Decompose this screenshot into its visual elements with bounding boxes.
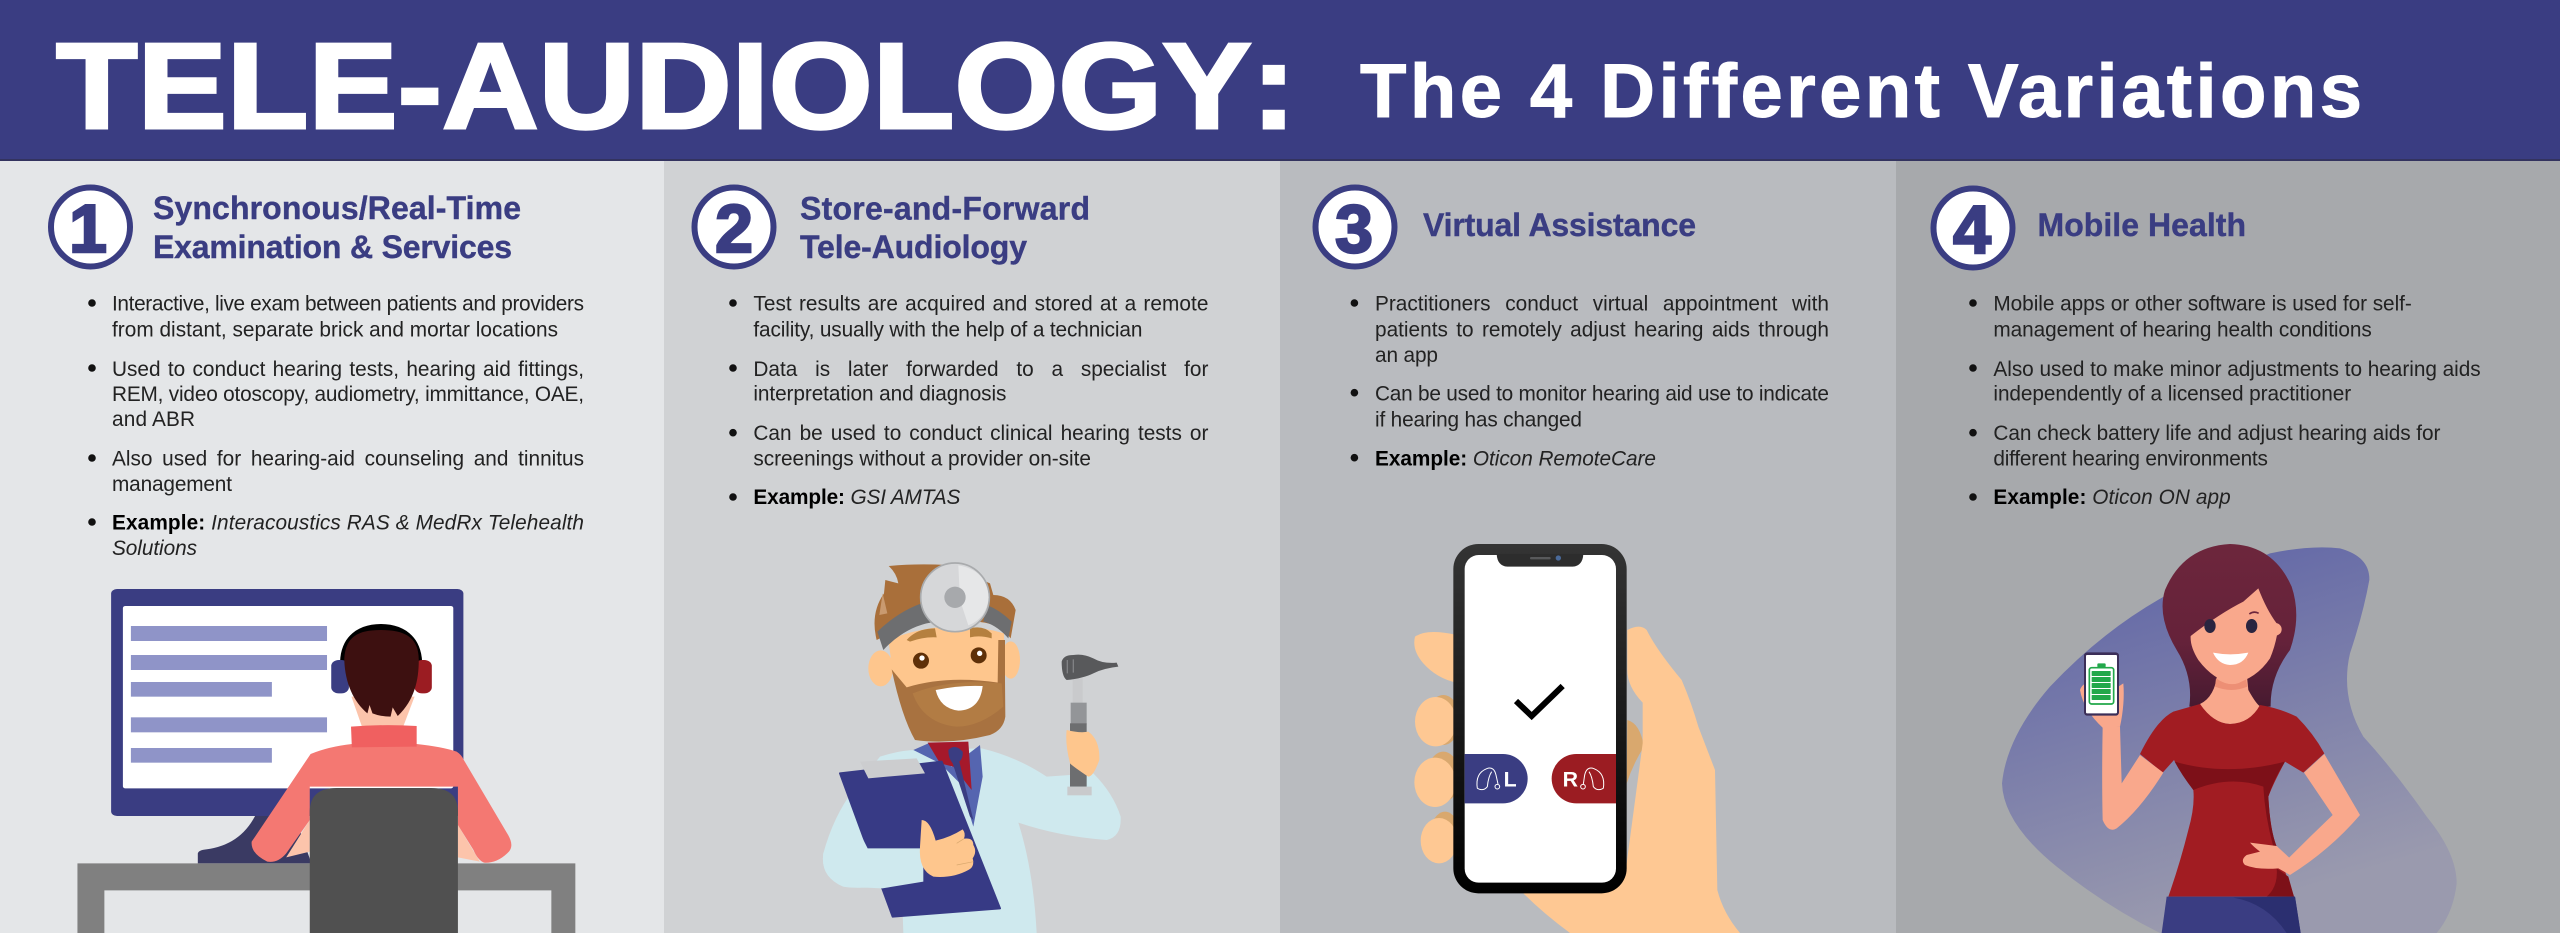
number badge 2 [694,188,774,267]
bullet list 2 [729,293,1208,509]
bullet list 3: Can be used to monitor hearing aid use to indicate [1375,383,1829,406]
bullet list 3: Practitioners conduct virtual appointment with [1375,293,1829,316]
bullet list 4: Mobile apps or other software is used for self- [1993,293,2412,316]
header banner [0,0,2560,161]
heading 2: Tele-Audiology [800,229,1027,265]
raised arm [2102,727,2163,830]
bullet list 2: screenings without a provider on-site [753,447,1091,470]
bullet list 1: REM, video otoscopy, audiometry, immittance, OAE, [112,383,584,406]
illustration: person at computer with headphones [77,589,575,933]
bullet list 1: Used to conduct hearing tests, hearing aid fittings, [112,358,584,381]
desk [77,863,575,933]
bullet list 4: Can check battery life and adjust hearing aids for [1993,422,2440,445]
background blob [2002,547,2457,933]
bullet list 1: Interactive, live exam between patients and providers [112,293,584,316]
check mark [1516,686,1563,716]
bullet list 1 [88,293,584,560]
arm on hip [2288,754,2360,875]
bullet list 1: management [112,473,232,496]
hand [1414,627,1740,933]
phone [1453,544,1627,893]
person [252,624,511,863]
left hearing aid button [1465,754,1528,803]
heading 1: Examination & Services [153,229,512,265]
illustration: woman holding phone with battery icon [2002,544,2457,933]
phone with battery [2084,652,2119,716]
lab coat [823,748,1121,933]
bullet list 1: and ABR [112,408,195,431]
heading 3: Virtual Assistance [1423,207,1696,243]
bullet list 4: Also used to make minor adjustments to hearing aids [1993,358,2481,381]
number badge 3: 3 [1335,191,1373,267]
number badge 1: 1 [69,191,107,267]
bullet list 3: patients to remotely adjust hearing aids through [1375,319,1829,342]
bullet list 4: different hearing environments [1993,447,2268,470]
panel: mobile health [1896,161,2560,933]
heading 2 [800,190,1090,265]
left hearing aid button: L [1504,768,1517,792]
bullet list 3 [1351,293,1829,470]
illustration: hand holding phone with hearing aid app [1414,544,1740,933]
right hearing aid button [1552,754,1616,803]
heading 2: Store-and-Forward [800,190,1090,226]
head mirror [877,563,1012,650]
title: TELE-AUDIOLOGY: [56,18,1296,154]
heading 4: Mobile Health [2038,207,2246,243]
chair [310,788,458,933]
number badge 4 [1934,188,2012,268]
bullet list 4: management of hearing health conditions [1993,319,2372,342]
number badge 4: 4 [1953,192,1991,268]
head [868,564,1020,742]
bullet list 1: from distant, separate brick and mortar locations [112,319,558,342]
trousers [2162,897,2301,933]
bullet list 2: Data is later forwarded to a specialist for [753,358,1208,381]
bullet list 3: if hearing has changed [1375,409,1582,432]
bullet list 2: Example: GSI AMTAS [753,486,961,509]
number badge 1 [51,188,130,267]
panel: virtual assistance [1280,161,1896,933]
subtitle: The 4 Different Variations [1360,49,2362,134]
right hearing aid button: R [1563,768,1578,792]
heading 1: Synchronous/Real-Time [153,190,521,226]
bullet list 2: facility, usually with the help of a technician [753,319,1142,342]
bullet list 3: an app [1375,344,1438,367]
illustration: audiologist with otoscope and clipboard [823,563,1121,933]
bullet list 4: Example: Oticon ON app [1993,486,2231,509]
otoscope [1062,655,1118,795]
bullet list 2: Can be used to conduct clinical hearing tests or [753,422,1208,445]
shirt [2140,704,2324,897]
bullet list 1: Example: Interacoustics RAS & MedRx Telehealth [112,512,584,534]
number badge 3 [1316,188,1394,267]
bullet list 4 [1969,293,2481,509]
panel: synchronous real-time [0,161,664,933]
monitor [111,589,463,863]
clipboard [840,758,1000,917]
bullet list 2: Test results are acquired and stored at a remote [753,293,1208,316]
bullet list 1: Also used for hearing-aid counseling and tinnitus [112,448,584,470]
number badge 2: 2 [715,191,753,267]
woman [2080,544,2360,933]
hand on clipboard [920,820,975,877]
bullet list 4: independently of a licensed practitioner [1993,383,2351,406]
heading 1 [153,190,521,265]
bullet list 3: Example: Oticon RemoteCare [1375,447,1656,470]
bullet list 2: interpretation and diagnosis [753,383,1006,406]
panel: store-and-forward [664,161,1280,933]
bullet list 1: Solutions [112,537,197,560]
